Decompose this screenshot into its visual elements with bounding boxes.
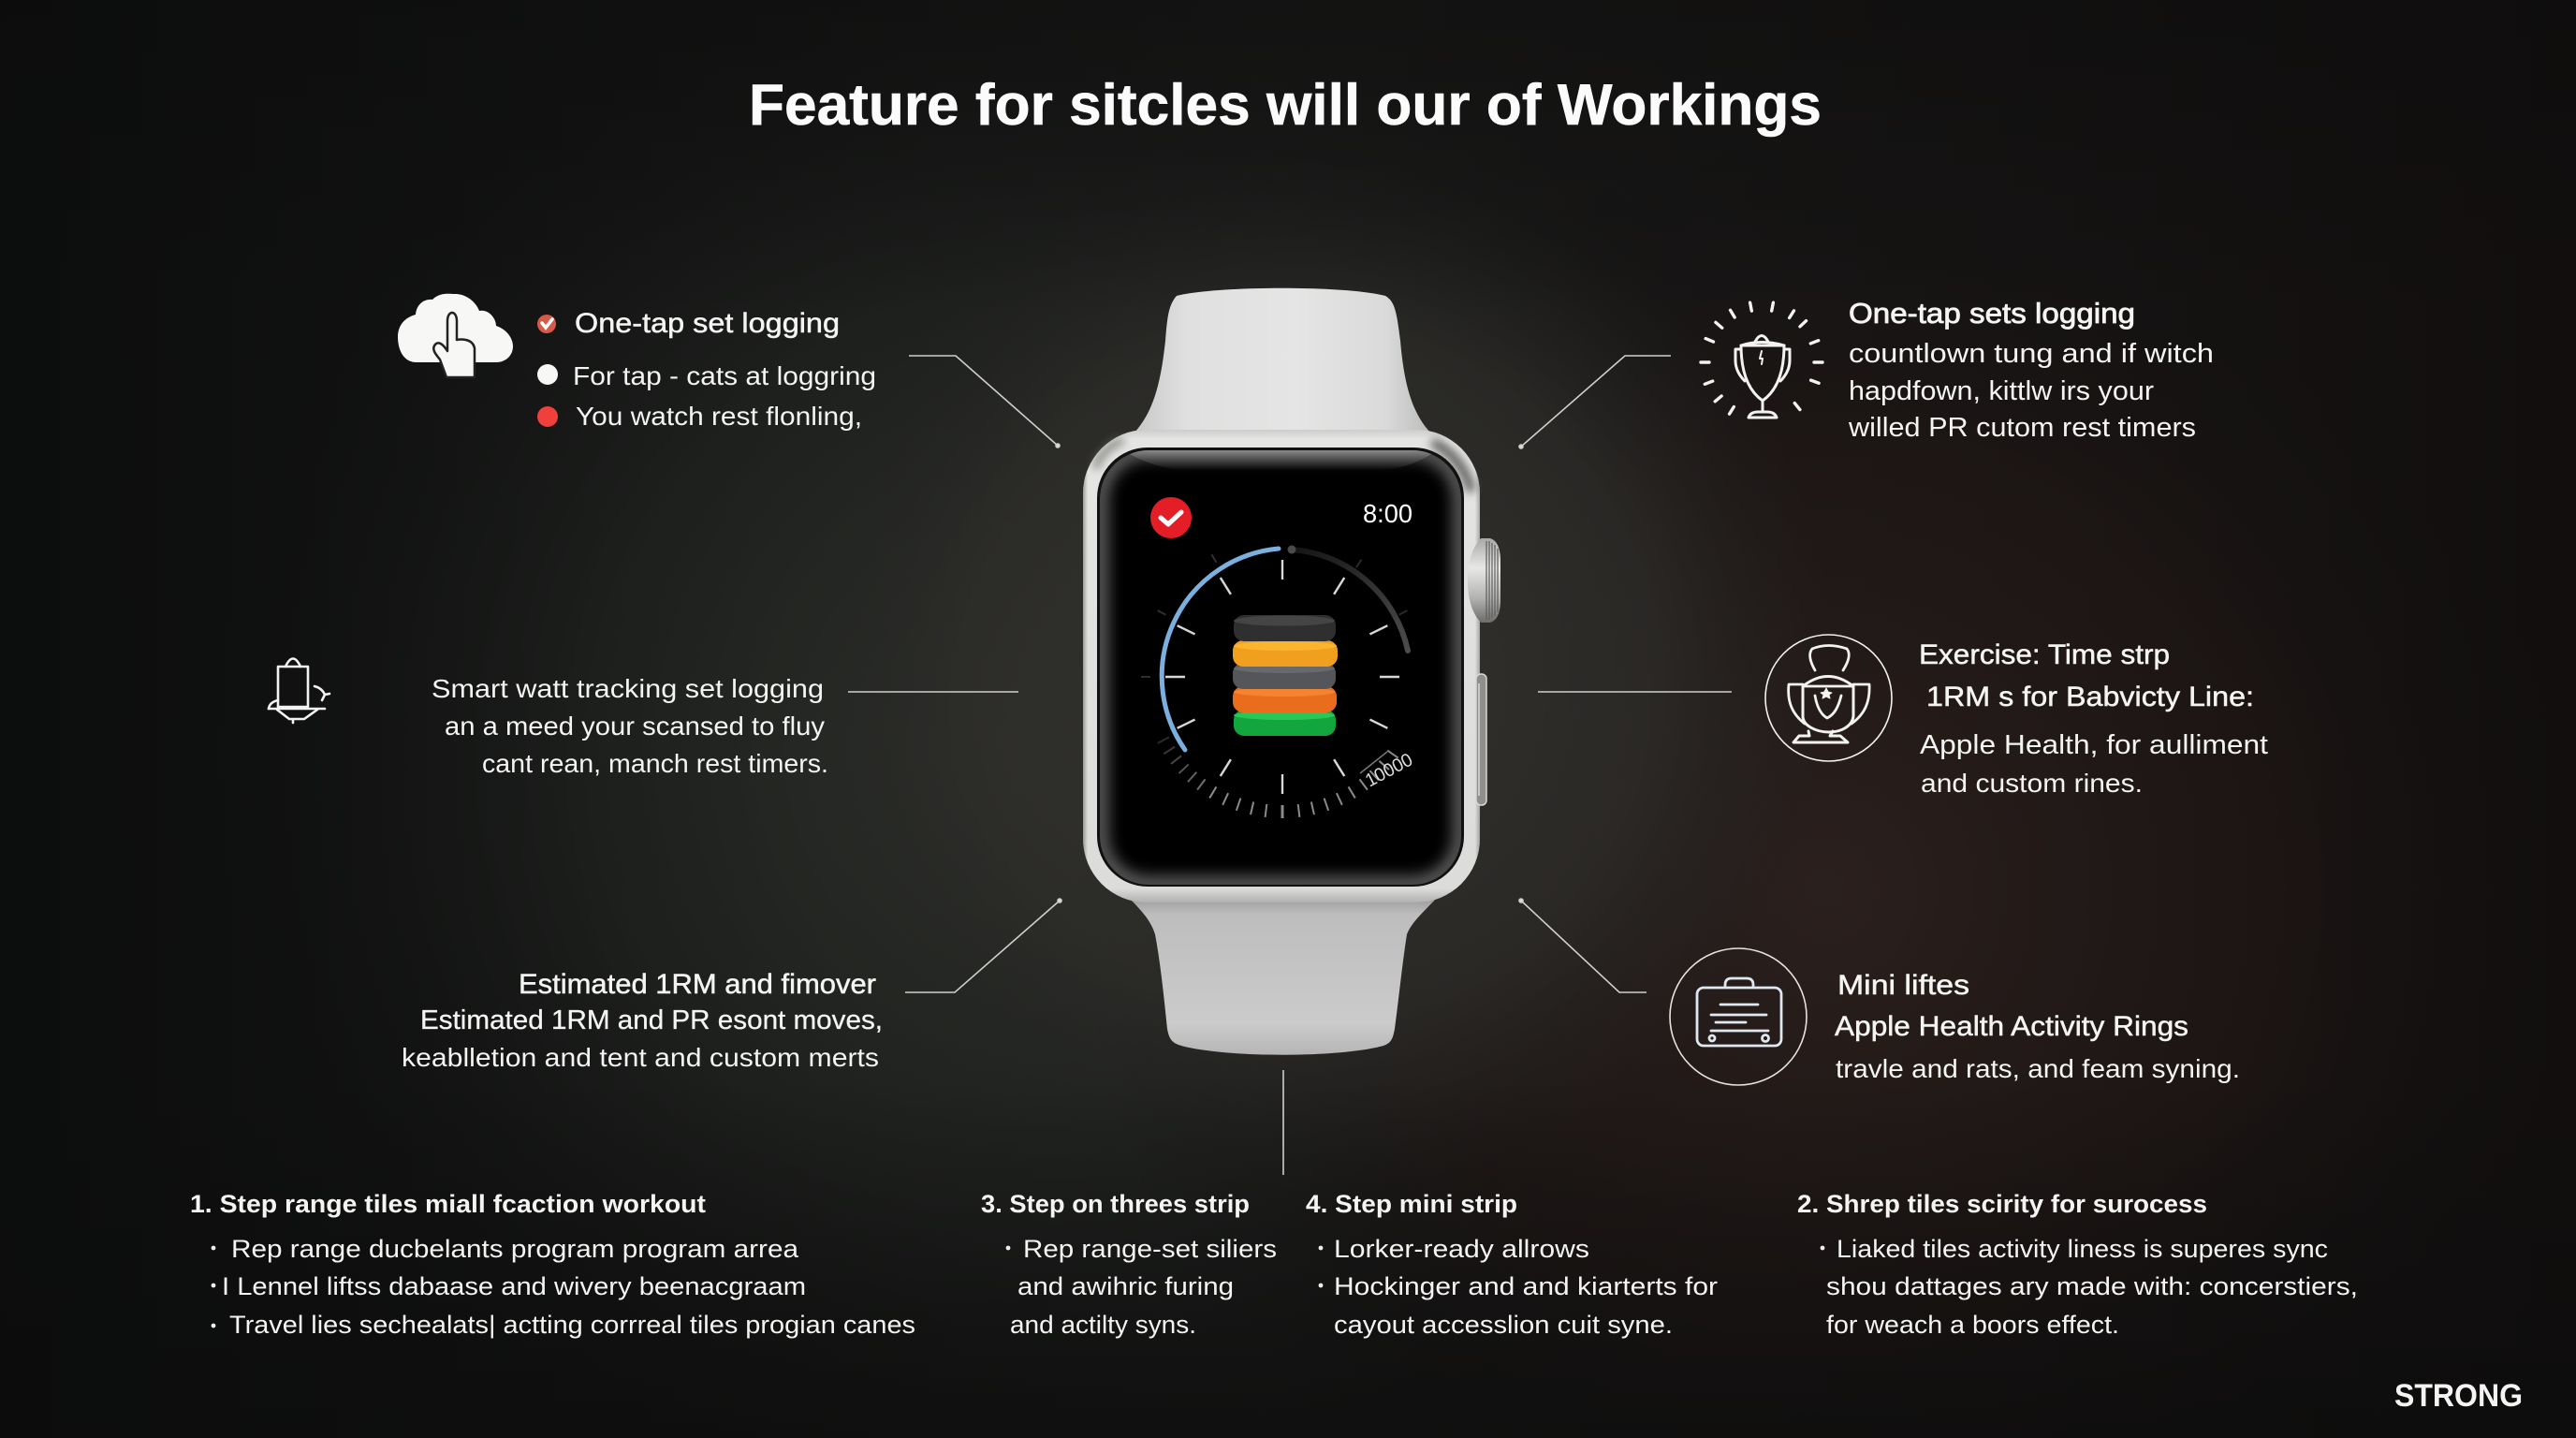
item heading: Estimated 1RM and fimover <box>519 969 876 1000</box>
icon: trophy in circle <box>1765 635 1892 761</box>
panel: top right feature <box>1701 297 2214 443</box>
progress arc dark <box>1288 545 1408 651</box>
panel: top left feature <box>398 294 876 431</box>
icon: trophy with rays <box>1701 302 1822 418</box>
item text: cant rean, manch rest timers. <box>482 749 828 778</box>
leader line: top right <box>1519 356 1671 448</box>
leader line: bottom <box>1282 1070 1284 1175</box>
time label: 8:00 <box>1363 499 1412 528</box>
step text: Lorker-ready allrows <box>1334 1235 1589 1263</box>
leader line: lower right <box>1519 899 1647 992</box>
item heading: Exercise: Time strp <box>1919 639 2170 670</box>
step text: Hockinger and and kiarterts for <box>1334 1272 1718 1300</box>
check badge <box>1150 497 1192 538</box>
step heading: 1. Step range tiles miall fcaction workout <box>190 1190 706 1218</box>
watch screen <box>1100 450 1461 885</box>
watch band: top <box>1134 288 1430 433</box>
bullet <box>212 1284 215 1287</box>
panel: middle right feature <box>1765 635 2268 798</box>
item heading: Mini liftes <box>1837 970 1969 1001</box>
step text: Liaked tiles activity liness is superes sync <box>1837 1235 2328 1263</box>
item text: travle and rats, and feam syning. <box>1836 1054 2240 1083</box>
step heading: 2. Shrep tiles scirity for surocess <box>1797 1190 2207 1218</box>
leader line: lower left <box>905 899 1061 992</box>
step text: Travel lies sechealats| actting corrreal tiles progian canes <box>229 1311 915 1339</box>
item text: keablletion and tent and custom merts <box>402 1043 879 1072</box>
bullet <box>1319 1284 1323 1287</box>
panel: step list 4 <box>1306 1190 1718 1339</box>
step text: I Lennel liftss dabaase and wivery beenacgraam <box>222 1272 806 1300</box>
item text: an a meed your scansed to fluy <box>445 712 825 741</box>
item text: willed PR cutom rest timers <box>1848 413 2196 443</box>
bullet <box>1319 1246 1323 1250</box>
leader line: middle right <box>1538 691 1732 693</box>
icon: cloud with hand <box>398 294 513 377</box>
item heading: 1RM s for Babvicty Line: <box>1926 682 2254 712</box>
watch case <box>1083 430 1480 902</box>
stacked discs <box>1233 615 1338 736</box>
panel: lower left feature <box>402 969 883 1072</box>
item heading: One-tap sets logging <box>1849 297 2135 330</box>
dial minor ticks <box>1141 554 1407 818</box>
title: Feature for sitcles will our of Workings <box>749 73 1822 138</box>
bullet check <box>537 315 556 333</box>
watch band: bottom <box>1130 899 1436 1055</box>
step heading: 3. Step on threes strip <box>981 1190 1250 1218</box>
panel: step list 1 <box>190 1190 915 1339</box>
step text: Rep range-set siliers <box>1023 1235 1277 1263</box>
icon: briefcase in circle <box>1670 948 1807 1085</box>
bullet <box>212 1324 215 1328</box>
panel: step list 2 <box>1797 1190 2358 1339</box>
icon: bell <box>269 659 329 723</box>
leader line: middle left <box>848 691 1018 693</box>
digital crown <box>1468 538 1500 623</box>
dial scale label: 10000 <box>1362 750 1416 791</box>
item text: Smart watt tracking set logging <box>432 674 824 703</box>
item heading: One-tap set logging <box>575 308 840 339</box>
watch illustration <box>1083 288 1500 1055</box>
step text: cayout accesslion cuit syne. <box>1334 1311 1673 1339</box>
step text: Rep range ducbelants program program arrea <box>231 1235 799 1263</box>
leader line: top left <box>909 356 1060 448</box>
item text: You watch rest flonling, <box>576 402 862 431</box>
bullet white <box>537 364 558 385</box>
brand wordmark: STRONG <box>2394 1378 2523 1414</box>
item text: countlown tung and if witch <box>1849 339 2214 369</box>
item heading: Apple Health Activity Rings <box>1835 1011 2188 1042</box>
step text: shou dattages ary made with: concerstiers, <box>1826 1272 2358 1300</box>
panel: lower right feature <box>1670 948 2240 1085</box>
bullet <box>1006 1246 1010 1250</box>
item text: and custom rines. <box>1921 769 2143 798</box>
item text: Estimated 1RM and PR esont moves, <box>420 1005 883 1035</box>
step text: for weach a boors effect. <box>1826 1311 2119 1339</box>
panel: middle left feature <box>269 659 828 778</box>
step text: and awihric furing <box>1017 1272 1234 1300</box>
bullet <box>212 1246 215 1250</box>
item text: Apple Health, for aulliment <box>1920 730 2268 760</box>
item text: For tap - cats at loggring <box>573 361 876 390</box>
panel: step list 3 <box>981 1190 1277 1339</box>
step text: and actilty syns. <box>1010 1311 1196 1339</box>
item text: hapdfown, kittlw irs your <box>1849 376 2154 406</box>
dial ticks <box>1165 560 1399 794</box>
bullet red <box>537 406 558 427</box>
progress arc blue <box>1162 549 1279 750</box>
step heading: 4. Step mini strip <box>1306 1190 1517 1218</box>
bullet <box>1821 1246 1824 1250</box>
side button <box>1476 674 1486 805</box>
